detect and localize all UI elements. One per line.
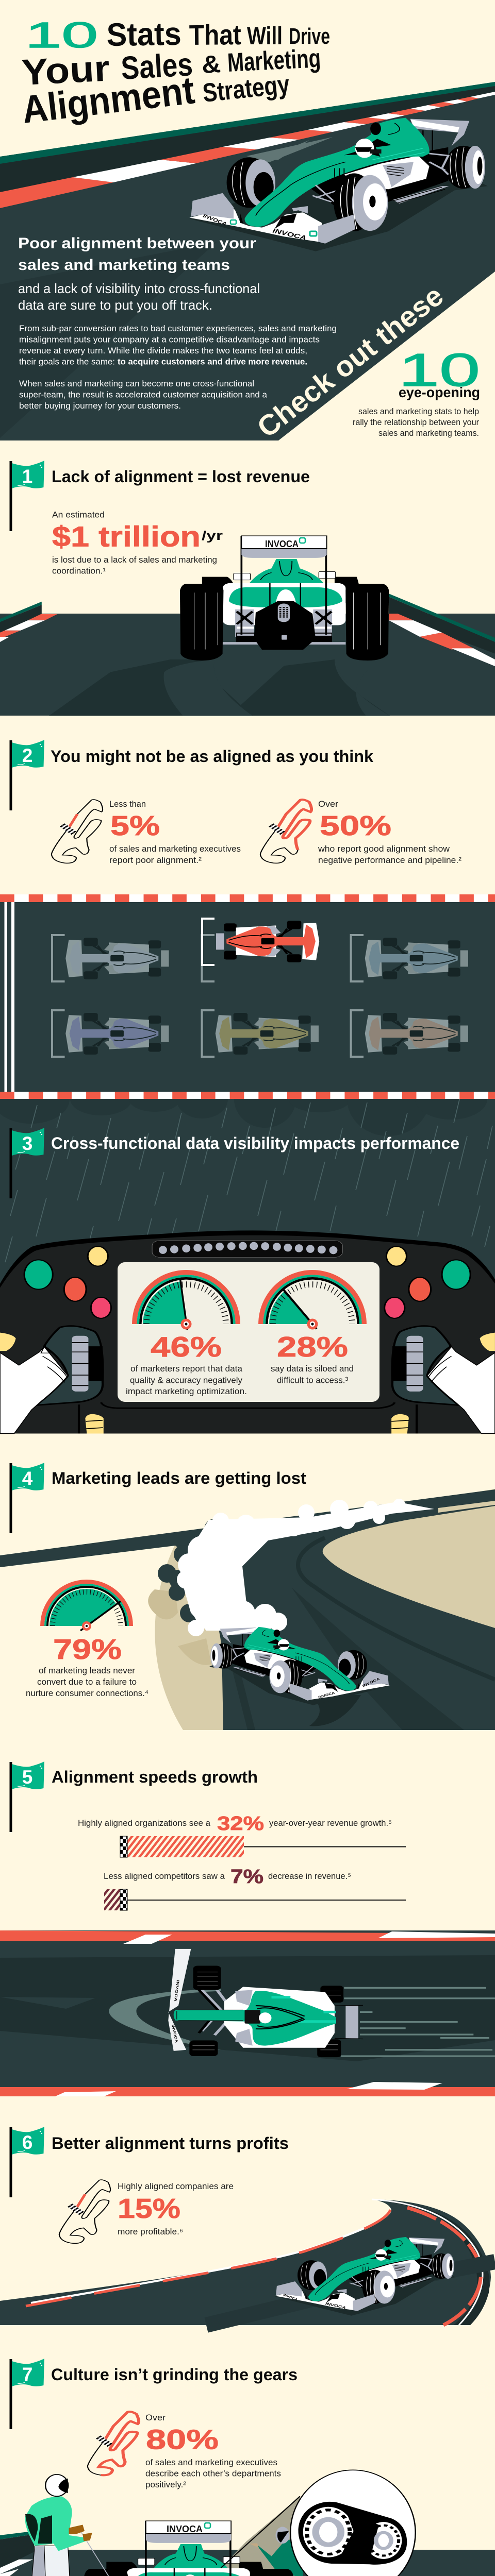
stat 46 percent	[126, 1331, 247, 1396]
track icon 5 percent	[52, 800, 103, 863]
straight track with kerbs	[0, 1930, 495, 2096]
tyre smoke	[158, 1499, 434, 1636]
flag 7: 7	[22, 2364, 32, 2385]
track icon 50 percent	[260, 800, 311, 863]
title	[20, 15, 330, 131]
rear view race car: INVOCA	[265, 539, 299, 549]
stat 5 percent: Less than	[109, 799, 146, 809]
stat 50 percent: who report good alignment show	[318, 844, 450, 854]
stat 80 percent: 80%	[146, 2425, 219, 2455]
flag 2	[9, 740, 44, 810]
starting grid	[0, 894, 495, 1099]
stat 79 percent	[26, 1633, 148, 1698]
title: Will	[247, 23, 283, 50]
bar 7 percent	[104, 1889, 406, 1910]
road section 1	[0, 594, 495, 716]
grid car grey	[65, 938, 169, 979]
gauge 46 percent	[132, 1270, 240, 1330]
intro paragraphs: misalignment puts your company at a competitive disadvantage and impacts	[19, 335, 320, 344]
heading 3: Cross-functional data visibility impacts performance	[51, 1134, 459, 1153]
stat 80 percent: positively.²	[145, 2480, 186, 2489]
drifting race car: INVOCA	[318, 1691, 336, 1700]
stat 79 percent: of marketing leads never	[39, 1666, 135, 1675]
intro paragraphs: to acquire customers and drive more revenue.	[118, 357, 307, 367]
stat 15 percent: Highly aligned companies are	[118, 2181, 234, 2191]
stat 1 text	[52, 510, 223, 576]
dashboard screen	[118, 1262, 380, 1402]
intro paragraphs: revenue at every turn. While the divide makes the two teams feel at odds,	[19, 346, 307, 355]
ten eye-opening stats callout	[353, 345, 480, 438]
stat 1 text: /yr	[202, 529, 223, 543]
flag 1	[9, 461, 44, 531]
flag 6	[9, 2127, 44, 2197]
stat 5 percent	[109, 799, 241, 865]
steering wheel	[0, 1230, 495, 1434]
title: &	[201, 50, 222, 79]
flag 5: 5	[22, 1767, 32, 1788]
heading 2: You might not be as aligned as you think	[51, 747, 373, 766]
rainy cockpit background	[0, 1099, 495, 1284]
grid car red	[216, 921, 319, 962]
stat 32 percent row	[78, 1813, 392, 1835]
flag 4	[9, 1463, 44, 1533]
flag 1: 1	[22, 466, 32, 487]
flag 7	[9, 2359, 44, 2429]
stat 80 percent	[145, 2413, 281, 2489]
stat 32 percent row: 32%	[217, 1813, 264, 1835]
heading 5: Alignment speeds growth	[52, 1768, 258, 1786]
corner race car: INVOCA	[283, 2294, 298, 2301]
gauge 79 percent	[40, 1580, 133, 1631]
stat 80 percent: describe each other’s departments	[145, 2469, 281, 2478]
stat 28 percent	[271, 1331, 354, 1385]
invoca wing labels: INVOCA	[173, 1980, 179, 2002]
stat 32 percent row: year-over-year revenue growth.⁵	[269, 1818, 392, 1828]
bar 32 percent	[120, 1836, 406, 1857]
title: Strategy	[201, 70, 291, 108]
intro subheading: data are sure to put you off track.	[18, 297, 212, 313]
flag 3	[9, 1128, 44, 1198]
rear car in pit	[84, 2521, 293, 2576]
stat 7 percent row: 7%	[230, 1866, 263, 1888]
intro paragraphs: better buying journey for your customers.	[19, 401, 181, 411]
intro paragraphs: their goals are the same:	[19, 357, 115, 367]
stat 7 percent row: Less aligned competitors saw a	[104, 1871, 225, 1881]
pit lane ground	[0, 2531, 495, 2576]
stat 46 percent: quality & accuracy negatively	[130, 1376, 242, 1385]
hero race car	[189, 118, 488, 251]
hero race car: INVOCA	[272, 227, 307, 242]
intro headline: sales and marketing teams	[18, 257, 230, 274]
title: Marketing	[227, 43, 321, 77]
title: 10	[25, 15, 98, 55]
stat 15 percent: 15%	[118, 2193, 180, 2224]
stat 80 percent: Over	[145, 2413, 166, 2422]
flag 3: 3	[22, 1133, 32, 1154]
stat 15 percent	[118, 2181, 234, 2236]
flag 2: 2	[22, 745, 32, 766]
flag 5	[9, 1761, 44, 1832]
stat 28 percent: difficult to access.³	[277, 1376, 348, 1385]
intro paragraphs: When sales and marketing can become one cross-functional	[19, 379, 254, 388]
stat 28 percent: say data is siloed and	[271, 1364, 354, 1374]
ten eye-opening stats callout: sales and marketing stats to help	[358, 406, 479, 416]
corner race car	[275, 2237, 456, 2316]
stat 50 percent: Over	[318, 799, 338, 809]
heading 1: Lack of alignment = lost revenue	[52, 467, 310, 486]
stat 46 percent: impact marketing optimization.	[126, 1386, 247, 1396]
ten eye-opening stats callout: sales and marketing teams.	[378, 428, 479, 438]
intro headline: Poor alignment between your	[18, 235, 256, 252]
hero race car: INVOCA	[202, 213, 227, 227]
rear view race car	[180, 536, 389, 660]
heading 7: Culture isn’t grinding the gears	[51, 2365, 298, 2384]
stat 15 percent: more profitable.⁶	[118, 2227, 183, 2236]
gauge 28 percent	[258, 1270, 367, 1329]
check out these slanted text: Check out these	[251, 279, 449, 444]
intro paragraphs	[19, 324, 337, 411]
stat 1 text: coordination.¹	[52, 566, 106, 576]
title: Drive	[289, 24, 330, 49]
intro headline	[18, 235, 256, 274]
stat 80 percent: of sales and marketing executives	[145, 2458, 277, 2467]
title: Stats	[106, 16, 182, 53]
top view race car	[109, 1949, 495, 2057]
drifting race car: INVOCA	[362, 1677, 381, 1688]
invoca wing labels: INVOCA	[171, 2024, 178, 2043]
stat 1 text: An estimated	[52, 510, 105, 519]
skid track	[0, 1489, 495, 1730]
stat 79 percent: nurture consumer connections.⁴	[26, 1688, 148, 1698]
stat 32 percent row: Highly aligned organizations see a	[78, 1818, 211, 1828]
heading 6: Better alignment turns profits	[52, 2134, 289, 2153]
ten eye-opening stats callout: 10	[399, 345, 480, 396]
title: That	[189, 19, 241, 51]
stat 5 percent: report poor alignment.²	[109, 855, 202, 865]
flag 4: 4	[22, 1468, 33, 1489]
invoca wing labels	[171, 1980, 179, 2043]
stat 1 text: $1 trillion	[52, 520, 201, 552]
intro subheading	[18, 281, 260, 313]
intro paragraphs: From sub-par conversion rates to bad customer experiences, sales and marketing	[19, 324, 337, 333]
track icon 15 percent	[59, 2180, 110, 2243]
stat 50 percent: 50%	[320, 810, 391, 841]
grid car purple	[65, 1013, 169, 1055]
hero road background	[0, 82, 495, 440]
stat 28 percent: 28%	[277, 1331, 348, 1363]
stat 5 percent: of sales and marketing executives	[109, 844, 241, 854]
grid car olive	[216, 1013, 319, 1055]
stat 79 percent: convert due to a failure to	[37, 1677, 137, 1687]
ten eye-opening stats callout: rally the relationship between your	[353, 417, 479, 427]
stat 46 percent: of marketers report that data	[130, 1364, 243, 1374]
magnifier with chain	[221, 2470, 416, 2576]
grid car blue grey	[365, 938, 468, 979]
track icon 80 percent	[88, 2412, 139, 2475]
rear car in pit: INVOCA	[167, 2524, 203, 2534]
title: Sales	[120, 46, 194, 87]
mechanic and magnifier	[221, 2496, 336, 2576]
stat 46 percent: 46%	[151, 1331, 222, 1363]
stat 1 text: is lost due to a lack of sales and marketing	[52, 555, 217, 565]
heading 4: Marketing leads are getting lost	[52, 1469, 306, 1487]
stat 79 percent: 79%	[53, 1633, 122, 1665]
grid car taupe	[365, 1013, 468, 1055]
stat 7 percent row	[104, 1866, 351, 1888]
pit crew member	[14, 2475, 194, 2576]
drifting race car	[209, 1627, 390, 1705]
stat 50 percent	[318, 799, 461, 865]
ten eye-opening stats callout: eye-opening	[399, 384, 480, 400]
curved track	[0, 2199, 495, 2325]
intro paragraphs: super-team, the result is accelerated customer acquisition and a	[19, 389, 268, 400]
intro subheading: and a lack of visibility into cross-functional	[18, 281, 260, 296]
stat 5 percent: 5%	[110, 810, 160, 841]
stat 7 percent row: decrease in revenue.⁵	[268, 1871, 351, 1881]
title: Alignment	[20, 68, 197, 131]
stat 50 percent: negative performance and pipeline.²	[318, 855, 461, 865]
title: Your	[21, 48, 111, 93]
corner race car: INVOCA	[325, 2301, 346, 2310]
flag 6: 6	[22, 2132, 32, 2153]
